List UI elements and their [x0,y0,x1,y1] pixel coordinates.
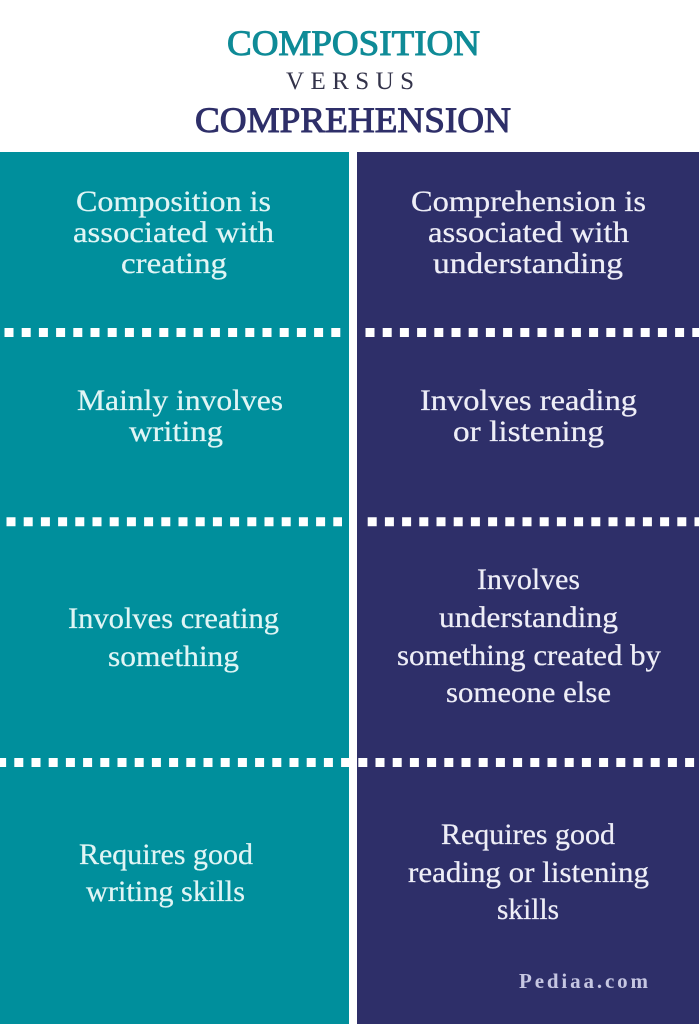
row 4 right text: Requires good [441,818,615,851]
row 2 right text: Involves reading [420,384,637,417]
watermark: Pediaa.com: Pediaa.com [519,969,648,993]
row 4 left text [79,838,253,908]
row 2 left text [77,384,283,448]
heading: versus: VERSUS [286,68,414,95]
panel: comprehension column [357,152,699,1024]
row 2 left text: writing [129,415,223,448]
row 2 right text [420,384,637,448]
row 4 left text: Requires good [79,838,253,871]
row 3 left text [68,602,279,673]
row 3 right text: understanding [439,601,618,634]
row 3 right text: someone else [446,676,611,709]
row 4 left text: writing skills [86,875,245,908]
row 4 right text: reading or listening [408,856,649,889]
row 1 right text: Comprehension is [411,185,646,218]
heading: composition: COMPOSITION [227,23,480,63]
row 1 right text: understanding [433,247,623,280]
row 1 right text: associated with [428,216,629,249]
row 3 right text: something created by [397,639,661,672]
row 1 left text: associated with [73,216,274,249]
title [195,23,511,140]
row 3 left text: something [108,640,239,673]
panel: composition column [0,152,349,1024]
heading: comprehension: COMPREHENSION [195,100,511,140]
row 1 right text [411,185,646,280]
row 3 right text [397,563,661,709]
row 4 right text: skills [497,893,559,926]
row 1 left text [73,185,274,280]
row 3 right text: Involves [477,563,580,596]
row 1 left text: creating [121,247,227,280]
row 4 right text [408,818,649,926]
row 2 left text: Mainly involves [77,384,283,417]
row 2 right text: or listening [453,415,604,448]
row 3 left text: Involves creating [68,602,279,635]
row 1 left text: Composition is [76,185,271,218]
